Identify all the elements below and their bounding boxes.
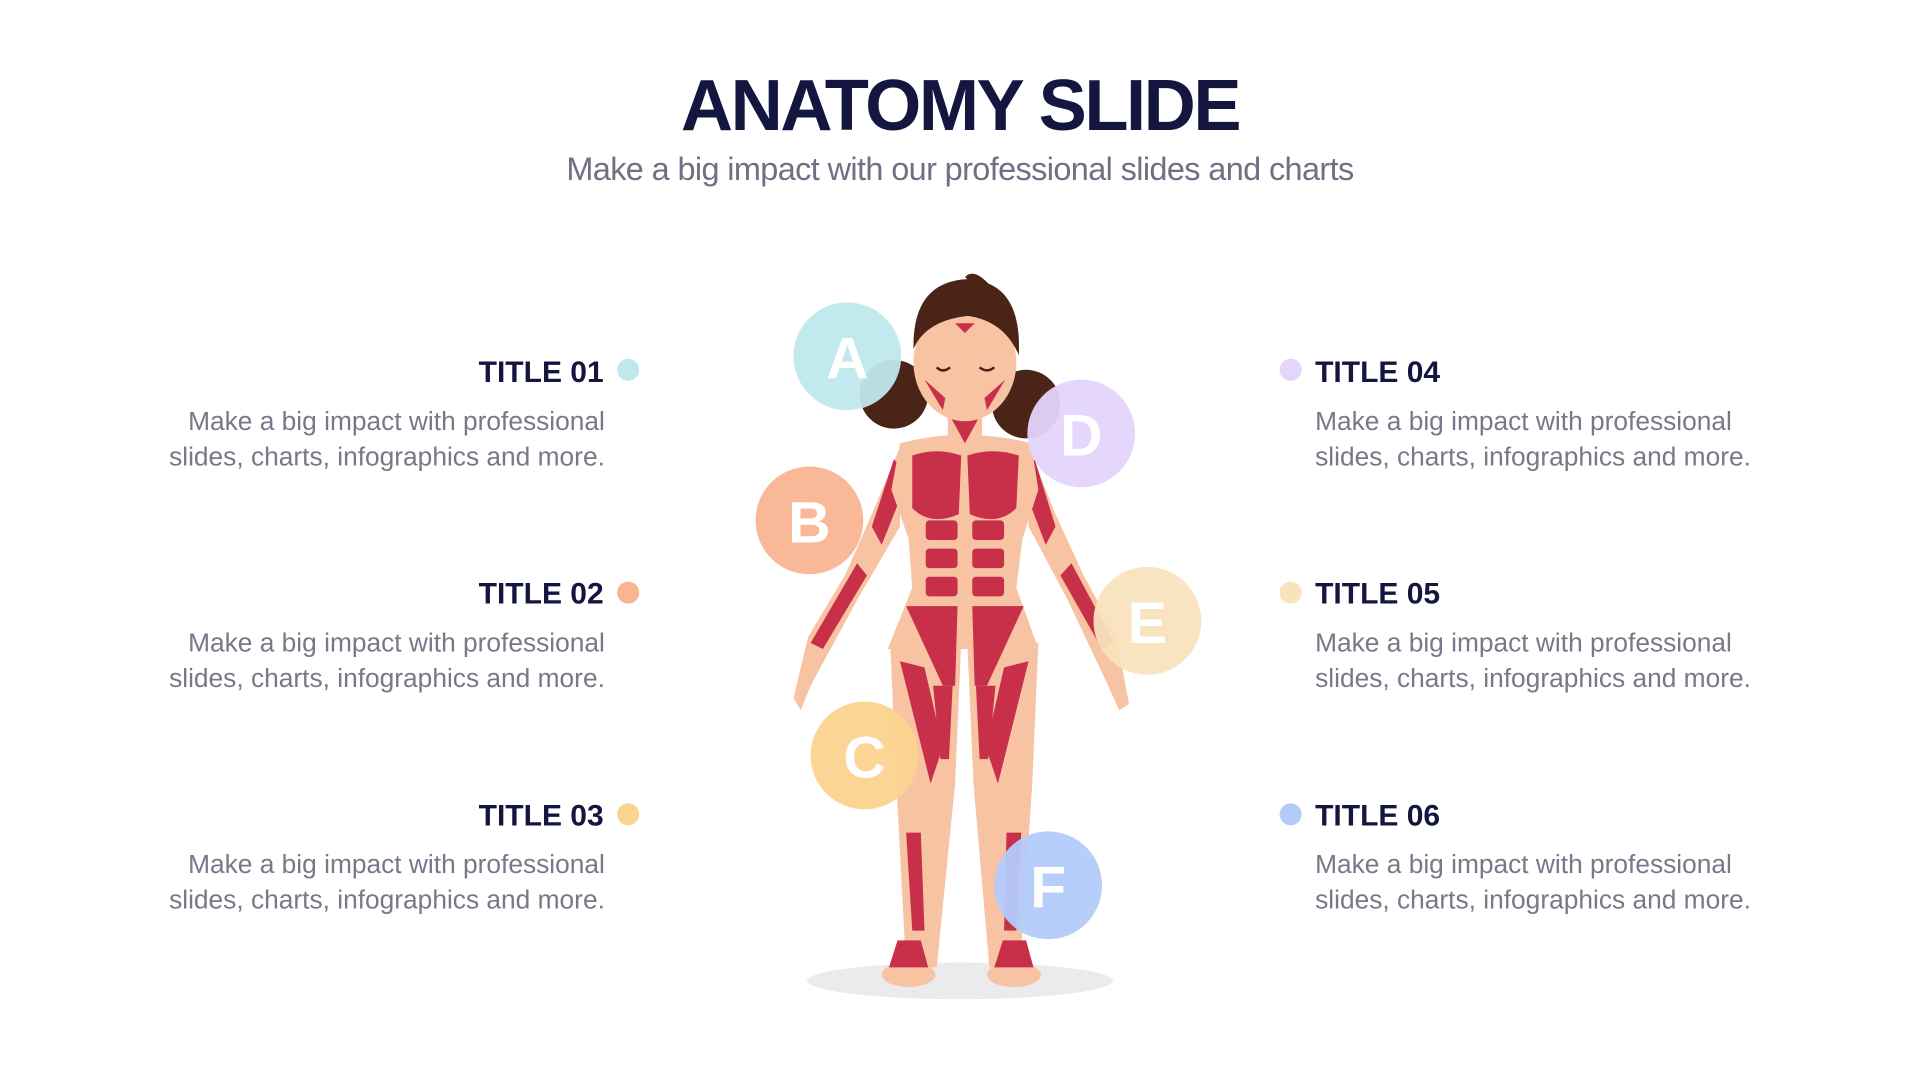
left item 02: TITLE 02	[479, 578, 604, 611]
letter circle C	[811, 702, 918, 809]
letter circle A: A	[826, 326, 869, 391]
left item 02	[169, 578, 639, 693]
left item 01: TITLE 01	[479, 356, 604, 389]
right item 04: Make a big impact with professional	[1315, 406, 1732, 436]
right item 06: TITLE 06	[1315, 799, 1440, 832]
right item 05	[1280, 578, 1751, 693]
letter circle A	[793, 302, 901, 410]
left item 03: slides, charts, infographics and more.	[169, 885, 605, 915]
right item 04	[1280, 356, 1751, 471]
letter circle E	[1093, 567, 1201, 675]
right item 06	[1280, 799, 1751, 915]
left item 02: slides, charts, infographics and more.	[169, 663, 605, 693]
left item 03: TITLE 03	[479, 799, 604, 832]
letter circle D	[1027, 380, 1135, 487]
letter circle D: D	[1060, 404, 1102, 469]
right item 04: TITLE 04	[1315, 356, 1440, 389]
right item 04: slides, charts, infographics and more.	[1315, 441, 1751, 471]
letter circle B: B	[788, 490, 831, 555]
letter circle C: C	[843, 726, 886, 791]
right item 05: TITLE 05	[1315, 578, 1440, 611]
left item 03	[169, 799, 639, 915]
right item 06: slides, charts, infographics and more.	[1315, 885, 1751, 915]
left item 03: Make a big impact with professional	[188, 849, 605, 879]
subtitle: Make a big impact with our professional slides and charts	[566, 151, 1354, 187]
left item 02: Make a big impact with professional	[188, 627, 605, 657]
letter circle E: E	[1128, 591, 1167, 656]
left item 01: slides, charts, infographics and more.	[169, 441, 605, 471]
letter circle F: F	[1030, 855, 1066, 920]
anatomy figure	[793, 277, 1129, 999]
left item 01	[169, 356, 639, 471]
title: ANATOMY SLIDE	[681, 66, 1239, 146]
right item 05: slides, charts, infographics and more.	[1315, 663, 1751, 693]
right item 05: Make a big impact with professional	[1315, 627, 1732, 657]
letter circle F	[994, 831, 1102, 939]
right item 06: Make a big impact with professional	[1315, 849, 1732, 879]
letter circle B	[756, 467, 863, 574]
left item 01: Make a big impact with professional	[188, 406, 605, 436]
